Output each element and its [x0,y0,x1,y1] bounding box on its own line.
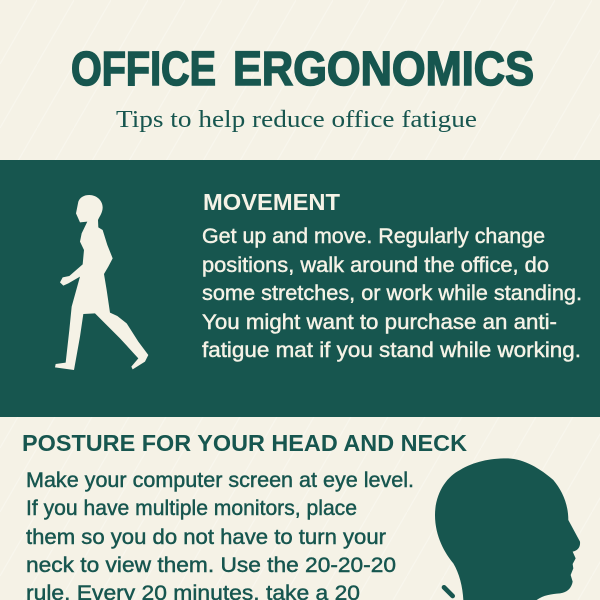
posture text: them so you do not have to turn your [26,526,386,549]
posture text: If you have multiple monitors, place [26,497,357,520]
movement text: You might want to purchase an anti- [202,311,557,334]
title: OFFICE [71,43,216,96]
posture text: Make your computer screen at eye level. [26,469,414,492]
posture text [26,469,414,600]
icon: walking person [55,195,148,370]
posture heading: POSTURE FOR YOUR HEAD AND NECK [22,430,467,456]
title: ERGONOMICS [233,43,534,96]
movement text: positions, walk around the office, do [202,254,549,277]
movement text: some stretches, or work while standing. [202,282,582,305]
posture text: neck to view them. Use the 20-20-20 [26,554,396,577]
panel: movement [0,160,600,417]
movement text: fatigue mat if you stand while working. [202,339,581,362]
movement heading: MOVEMENT [203,189,340,215]
icon: head profile [435,458,580,600]
subtitle: Tips to help reduce office fatigue [116,106,477,133]
movement text: Get up and move. Regularly change [202,225,545,248]
movement text [202,225,582,362]
